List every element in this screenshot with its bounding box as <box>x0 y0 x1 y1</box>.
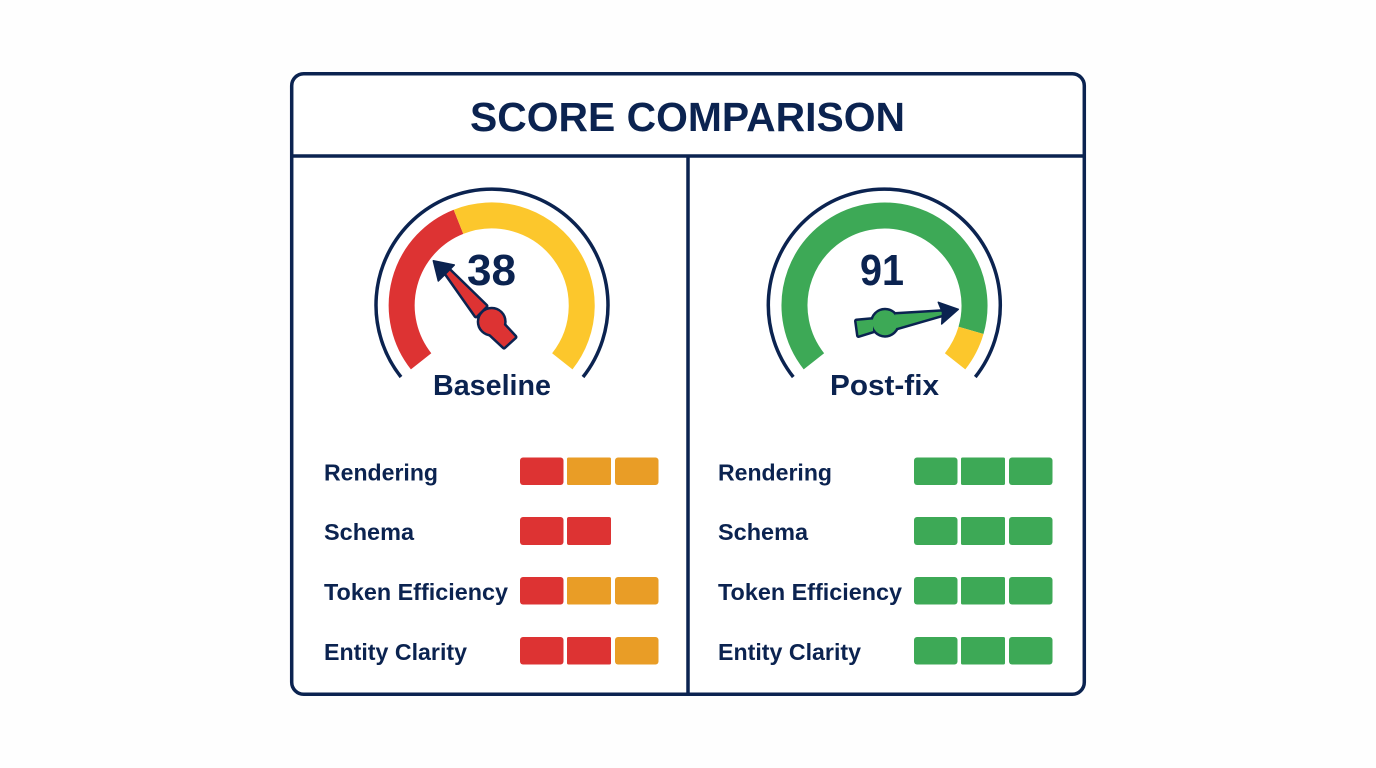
gauge green segment <box>795 215 975 361</box>
gauge needle <box>433 261 515 347</box>
row: entity clarity: Entity Clarity <box>718 639 861 665</box>
row: schema: Schema <box>324 519 415 545</box>
row: entity clarity <box>718 637 1052 665</box>
title: SCORE COMPARISON <box>470 94 905 140</box>
gauge outer ring <box>768 189 1000 377</box>
gauge label: post-fix: Post-fix <box>830 370 939 402</box>
gauge: baseline score 38 <box>376 189 608 377</box>
row: rendering: Rendering <box>718 460 832 486</box>
row: rendering <box>718 458 1052 486</box>
row: entity clarity <box>324 637 658 665</box>
panel: baseline <box>324 189 658 665</box>
gauge label: baseline: Baseline <box>433 370 551 402</box>
row: schema: Schema <box>718 519 809 545</box>
gauge red segment <box>402 222 458 361</box>
row: token efficiency <box>718 577 1052 605</box>
row: token efficiency: Token Efficiency <box>718 579 902 605</box>
panel: post-fix <box>718 189 1052 665</box>
row: schema <box>324 517 611 545</box>
row: rendering <box>324 458 658 486</box>
comparison card frame <box>292 74 1084 694</box>
row: schema <box>718 517 1052 545</box>
gauge yellow segment <box>955 330 971 361</box>
row: token efficiency: Token Efficiency <box>324 579 508 605</box>
gauge outer ring <box>376 189 608 377</box>
row: token efficiency <box>324 577 658 605</box>
row: rendering: Rendering <box>324 460 438 486</box>
gauge yellow segment <box>458 215 582 361</box>
gauge: post-fix score 91 <box>768 189 1000 377</box>
score number: 38 <box>467 246 516 295</box>
row: entity clarity: Entity Clarity <box>324 639 467 665</box>
gauge needle <box>856 302 958 336</box>
score number: 91 <box>860 246 904 295</box>
